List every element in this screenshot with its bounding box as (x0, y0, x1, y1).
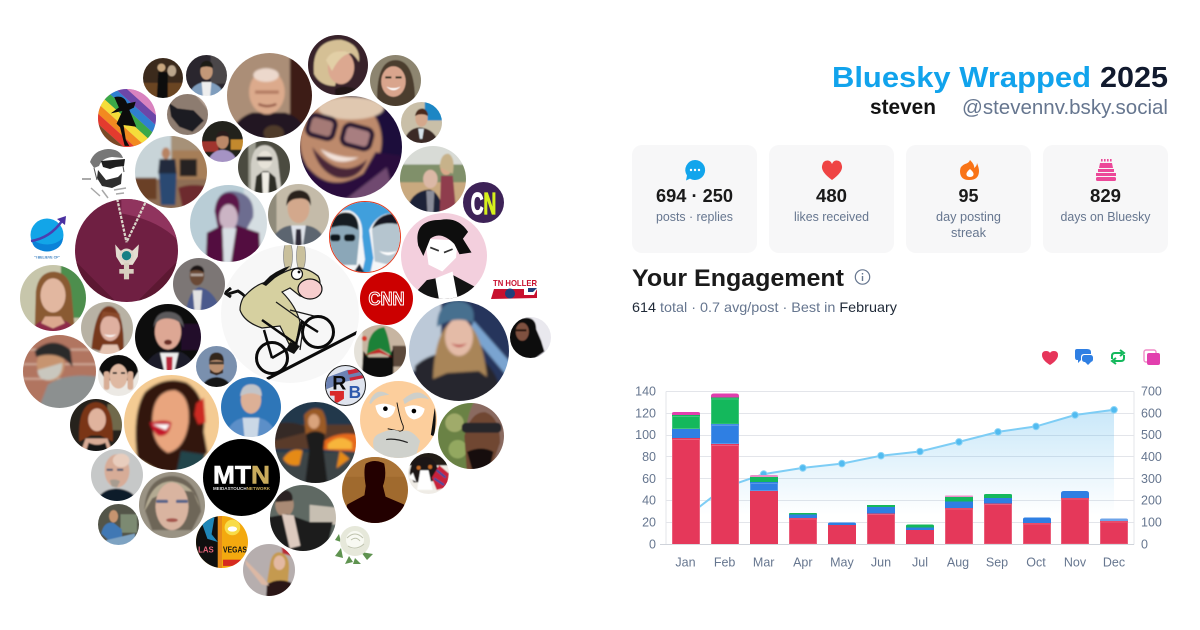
stat card: posts and replies: posts · replies (656, 210, 733, 224)
icon: heart (822, 160, 842, 180)
icon: cake (1096, 159, 1116, 181)
month labels: Feb (714, 556, 735, 570)
stat card: days on Bluesky: 829 (1090, 186, 1121, 206)
month labels (675, 556, 1125, 570)
avatar: smiling woman with long hair (370, 55, 421, 106)
avatar: bearded man in beanie (23, 335, 96, 408)
stat card: streak (906, 145, 1031, 253)
avatar: two men on blue (329, 201, 401, 273)
avatar: donkey on bicycle (221, 245, 359, 383)
avatar: woman standing in a room (135, 136, 207, 208)
stat card: likes: likes received (794, 210, 869, 224)
avatar: silhouette on amber (342, 457, 408, 523)
avatar: man with glasses and blue jacket (173, 258, 225, 310)
avatar: R B logo: B (349, 382, 361, 402)
avatar: man in lilac shirt (202, 121, 243, 162)
icon: quotes (1144, 350, 1160, 365)
left axis labels (635, 384, 656, 552)
icon: chat bubble (685, 160, 705, 180)
avatar: woman in blue beanie (409, 301, 509, 401)
avatar: woman in black with dog (143, 58, 183, 98)
avatar: woman with auburn hair (20, 265, 86, 331)
right axis labels: 700 (1141, 384, 1162, 398)
avatar: necklace on maroon fabric (75, 199, 178, 302)
icon: info (855, 270, 870, 284)
avatar: blonde in Santa hat (243, 544, 295, 596)
avatar: man with dark jacket (270, 485, 336, 551)
stat card: days on Bluesky: days on Bluesky (1060, 210, 1151, 224)
avatar: black wolf (167, 94, 208, 135)
avatar: woman with curly red hair (70, 399, 122, 451)
avatar: fantasy woman with fire (275, 402, 356, 483)
avatar: Las Vegas poster (196, 516, 248, 568)
engagement summary: 614 total · 0.7 avg/post · Best in February (632, 299, 897, 315)
left axis labels: 80 (642, 450, 656, 464)
avatar: Black woman with long hair (510, 317, 551, 358)
avatar: anime man on pink (401, 213, 487, 299)
right axis labels: 400 (1141, 450, 1162, 464)
grid lines (666, 392, 1134, 544)
left axis labels: 0 (649, 538, 656, 552)
month labels: Aug (947, 556, 969, 570)
month labels: Apr (793, 556, 813, 570)
icon: likes (1042, 351, 1058, 365)
right axis labels: 0 (1141, 538, 1148, 552)
avatar: man on blue background (221, 377, 281, 437)
month labels: Jan (675, 556, 696, 570)
stat card: streak: streak (951, 226, 987, 240)
avatar: smiling woman with red-brown hair (81, 302, 133, 354)
avatar: man with sunglasses and foliage (438, 403, 504, 469)
stat card: likes: 480 (816, 186, 847, 206)
avatar: man with tools (98, 504, 139, 545)
avatar: MTN logo (203, 439, 280, 516)
avatar: man in grey suit (268, 184, 329, 245)
avatar: blonde actress portrait (139, 472, 205, 538)
right axis labels: 600 (1141, 406, 1162, 420)
avatar: spaniel with patriotic scarf (408, 453, 449, 494)
handle: @stevennv.bsky.social (962, 97, 1168, 119)
month labels: Oct (1026, 556, 1046, 570)
stat card: streak: 95 (958, 186, 978, 206)
avatar: woman holding her face (98, 355, 139, 396)
month labels: Jul (912, 556, 928, 570)
avatar: globe with arrow (30, 216, 66, 260)
right axis labels: 100 (1141, 516, 1162, 530)
avatar: black cat in elf hat (354, 325, 406, 377)
avatar: blonde woman (308, 35, 368, 95)
user name: steven (870, 96, 936, 119)
legend icons (1042, 349, 1160, 365)
avatar: white rose (335, 526, 373, 564)
stat card: posts and replies (632, 145, 757, 253)
month labels: Dec (1103, 556, 1125, 570)
avatar: CNN logo: CNN (368, 289, 405, 309)
avatar: MTN logo: MTN (213, 462, 270, 490)
left axis labels: 20 (642, 516, 656, 530)
icon: flame (960, 160, 979, 180)
month labels: Sep (986, 556, 1008, 570)
avatar: man in suit, blue sign (401, 102, 442, 143)
avatar: cartoon old man (360, 381, 437, 458)
avatar: Las Vegas poster: LAS (198, 545, 214, 554)
cumulative area (686, 410, 1114, 544)
avatar: MTN logo: MEIDASTOUCH NETWORK (213, 486, 270, 491)
avatar: R B logo (325, 365, 366, 406)
avatar: couple outdoors (400, 146, 466, 212)
left axis labels: 60 (642, 472, 656, 486)
stat card: likes (769, 145, 894, 253)
stat card: days on Bluesky (1043, 145, 1168, 253)
avatar: man with black glasses on blue (196, 346, 237, 387)
avatar: laughing woman with red bow (124, 375, 219, 470)
icon: replies (1075, 349, 1093, 365)
right axis labels: 200 (1141, 494, 1162, 508)
avatar: globe with arrow: "I BELIEVE CF" (34, 256, 60, 260)
stat card: posts and replies: 694 · 250 (656, 186, 733, 206)
cumulative line (686, 406, 1117, 518)
avatar: bald man with microphone (227, 53, 312, 138)
avatar: sketched man with sunglasses (82, 149, 126, 198)
title: 2025 (1100, 62, 1168, 94)
avatar: politician in dark suit (135, 304, 201, 370)
right axis labels: 300 (1141, 472, 1162, 486)
avatar cluster (20, 35, 551, 596)
avatar: man with glasses, purple tint (300, 96, 402, 198)
right axis labels: 500 (1141, 428, 1162, 442)
title: Bluesky Wrapped (832, 62, 1091, 94)
icon: reposts (1112, 350, 1124, 364)
month labels: Jun (871, 556, 891, 570)
avatar: R B logo: R (332, 372, 346, 394)
left axis labels: 40 (642, 494, 656, 508)
right axis labels (1141, 384, 1162, 552)
avatar: man in blue blazer (186, 55, 227, 96)
section heading: Your Engagement (632, 265, 844, 292)
month labels: May (830, 556, 854, 570)
avatar: CN logo (463, 182, 504, 223)
left axis labels: 120 (635, 406, 656, 420)
avatar: black and white blonde (238, 141, 290, 193)
month labels: Nov (1064, 556, 1087, 570)
avatar: CNN logo (360, 272, 413, 325)
avatar: pride silhouette (98, 89, 156, 147)
avatar: woman in duotone maroon blazer (190, 185, 267, 262)
month labels: Mar (753, 556, 774, 570)
avatar: TN Holler logo (491, 278, 537, 299)
stacked bars (672, 394, 1128, 544)
avatar: bald man with goatee (91, 449, 143, 501)
avatar: TN Holler logo: TN HOLLER (493, 278, 537, 288)
combined bar and line chart (635, 384, 1162, 570)
left axis labels: 140 (635, 384, 656, 398)
left axis labels: 100 (635, 428, 656, 442)
stat card: streak: day posting (936, 210, 1001, 224)
